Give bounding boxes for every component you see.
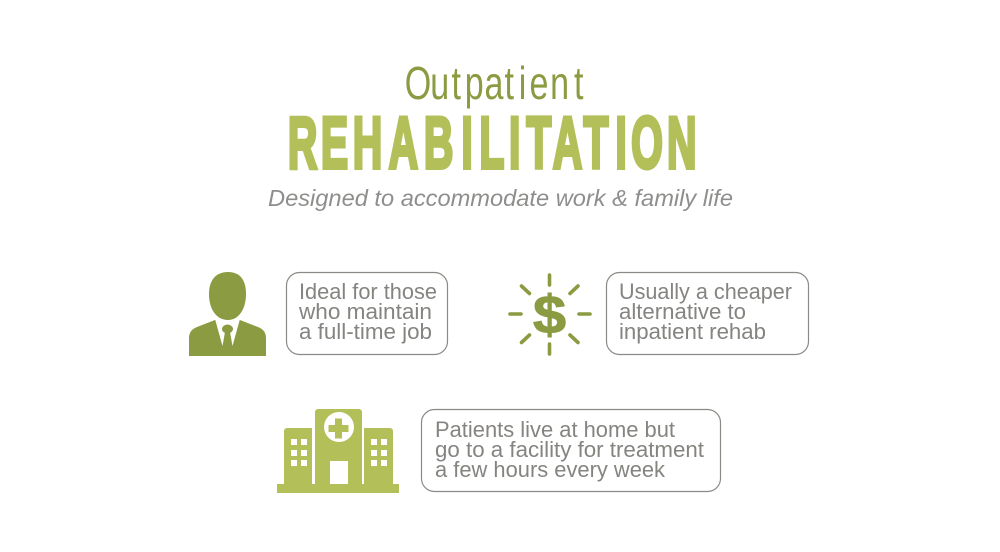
callout: cheaper alternative: Usually a cheaper [619, 279, 792, 304]
icon: dollar with rays [510, 275, 590, 354]
callout: full-time job [286, 272, 448, 354]
callout: cheaper alternative: inpatient rehab [619, 319, 766, 344]
callout: full-time job: who maintain [298, 299, 432, 324]
callout: live at home: Patients live at home but [435, 417, 675, 442]
callout: live at home [422, 410, 720, 492]
subtitle: Designed to accommodate work & family life [268, 185, 733, 211]
callout: full-time job: Ideal for those [299, 279, 437, 304]
callout: live at home: a few hours every week [435, 457, 666, 482]
title: Rehabilitation: REHABILITATION [288, 101, 696, 184]
callout: live at home: go to a facility for treatment [435, 437, 704, 462]
icon: businessman [189, 272, 266, 356]
callout: cheaper alternative: alternative to [619, 299, 746, 324]
icon: hospital [277, 409, 399, 493]
title: Outpatient: Outpatient [405, 57, 583, 109]
icon: dollar with rays: $ [533, 285, 566, 345]
callout: cheaper alternative [606, 272, 808, 354]
callout: full-time job: a full-time job [299, 319, 432, 344]
